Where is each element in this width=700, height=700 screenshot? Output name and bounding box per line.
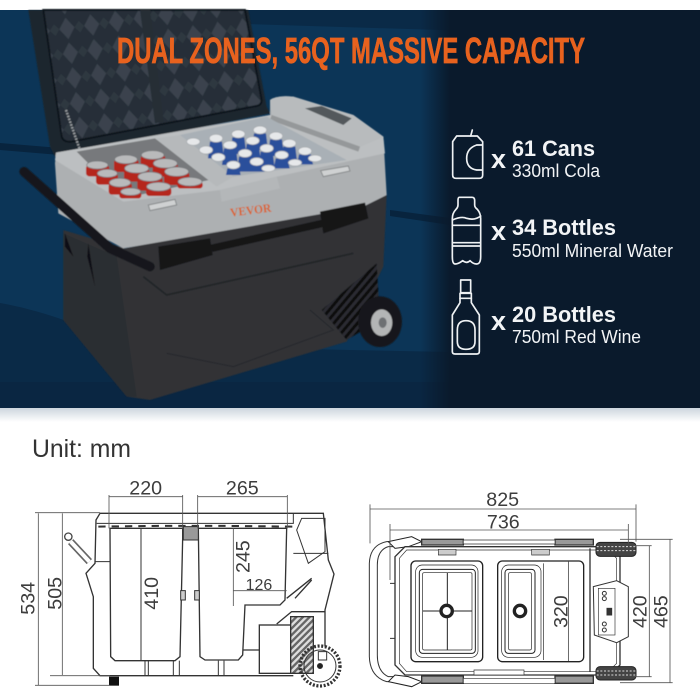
top view dimension drawing — [369, 489, 673, 687]
capacity text: wine: x — [491, 306, 506, 336]
cooler grey top — [55, 96, 387, 248]
icon: wine bottle — [452, 280, 479, 354]
capacity text: cans — [491, 136, 601, 181]
side view dimension drawing — [17, 477, 340, 686]
side dimension lines — [35, 495, 287, 685]
capacity text: cans: 330ml Cola — [512, 161, 601, 181]
knobs — [441, 605, 526, 617]
capacity list — [452, 130, 483, 354]
capacity text: water: x — [491, 216, 506, 246]
compartments — [110, 527, 287, 676]
foot — [109, 677, 119, 686]
control panel — [593, 581, 628, 643]
top handle — [369, 537, 422, 687]
capacity text: wine — [491, 302, 641, 347]
capacity text: water: 34 Bottles — [512, 215, 616, 240]
side dimension numbers: 505 — [44, 577, 66, 610]
side dimension numbers: 265 — [226, 477, 259, 499]
side wheel — [300, 646, 340, 686]
ventilation grille — [322, 263, 380, 340]
top dimension numbers: 320 — [551, 595, 573, 628]
unit label: Unit: mm — [32, 435, 131, 463]
top dimension numbers: 736 — [487, 511, 520, 533]
compartment: right lid — [498, 561, 584, 662]
capacity text: cans: x — [491, 144, 506, 174]
side dimension numbers: 245 — [233, 540, 255, 573]
top dimension numbers — [486, 489, 673, 628]
photo banner background — [0, 10, 700, 422]
side outline — [86, 513, 334, 676]
VEVOR logo: VEVOR — [229, 201, 272, 220]
top dimension lines — [370, 504, 673, 683]
top dimension numbers: 420 — [629, 595, 651, 628]
left compartment with cans — [77, 135, 233, 198]
capacity text: wine: 750ml Red Wine — [512, 327, 641, 347]
capacity text: water: 550ml Mineral Water — [512, 241, 673, 261]
icon: water bottle — [452, 197, 481, 264]
compartment: left lid — [411, 561, 483, 662]
right compartment with bottles — [180, 117, 347, 177]
side dimension numbers: 534 — [17, 582, 39, 615]
product photo: dual zone cooler — [24, 10, 402, 400]
capacity text: wine: 20 Bottles — [512, 302, 616, 327]
top body outline — [395, 539, 620, 683]
side handle — [65, 533, 89, 562]
compressor section — [243, 578, 325, 673]
side dimension numbers — [17, 477, 272, 615]
side dimension numbers: 410 — [141, 577, 163, 610]
side dimension numbers: 126 — [246, 577, 272, 594]
cooler dark body — [63, 195, 387, 400]
wheel — [358, 296, 402, 347]
icon: can — [453, 130, 483, 178]
top wheels — [596, 542, 636, 680]
cooler lid — [28, 10, 270, 157]
capacity text: cans: 61 Cans — [512, 136, 595, 161]
top dimension numbers: 825 — [486, 489, 519, 511]
top dimension numbers: 465 — [651, 595, 673, 628]
side dimension numbers: 220 — [129, 477, 162, 499]
capacity text: water — [491, 215, 673, 261]
trolley handle and latches — [24, 172, 368, 270]
